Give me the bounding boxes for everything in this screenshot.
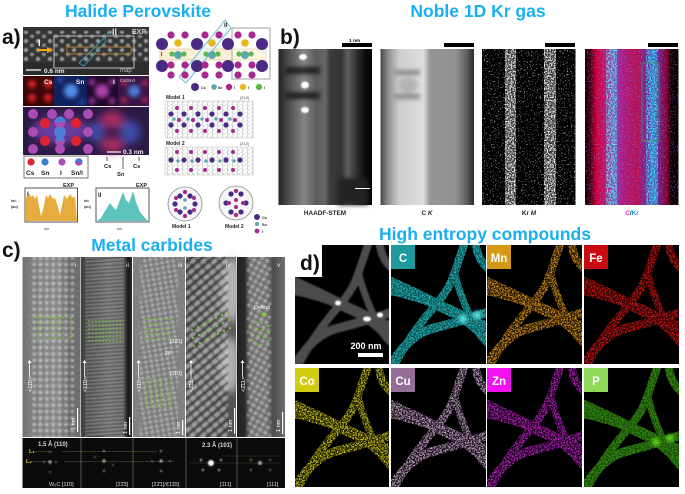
line profile I bbox=[11, 183, 78, 231]
HRTEM image v: v bbox=[277, 262, 281, 269]
line profile I: Int. bbox=[11, 199, 17, 203]
image captions: HAADF-STEM bbox=[304, 210, 346, 217]
HRTEM image i: <11̄0> bbox=[28, 377, 34, 392]
HRTEM image ii bbox=[81, 257, 132, 437]
model 1 cross-section bbox=[168, 187, 202, 230]
HAADF-STEM image bbox=[278, 49, 372, 205]
crystal structure bbox=[156, 20, 270, 83]
HRTEM image v: 1 nm bbox=[276, 419, 282, 432]
column labels with arrows: Sn bbox=[117, 172, 125, 178]
column labels with arrows bbox=[104, 157, 140, 178]
HRTEM image iii: [110] bbox=[170, 371, 182, 377]
HRTEM image v: <2̄11> bbox=[241, 377, 247, 392]
map: C bbox=[387, 241, 491, 367]
crystal legend: Cs bbox=[201, 86, 206, 90]
crystal legend: Sn bbox=[218, 86, 223, 90]
map: P bbox=[580, 364, 684, 490]
label d) on white tab bbox=[295, 245, 322, 277]
column labels with arrows: Cs bbox=[104, 164, 111, 170]
model 2 nanotube bbox=[165, 141, 253, 175]
HAADF fibers image: 200 nm bbox=[350, 341, 382, 351]
panel c: metal carbides bbox=[2, 239, 285, 488]
FFT strip: [111] bbox=[267, 482, 279, 488]
column labels with arrows: Cs bbox=[133, 164, 140, 170]
legend: elements: I bbox=[60, 170, 62, 177]
model 2 nanotube: Model 2 bbox=[166, 141, 185, 147]
FFT strip: [22̄1]//[11̄0] bbox=[152, 482, 180, 488]
crystal structure: I bbox=[161, 52, 163, 58]
label a): a) bbox=[2, 26, 21, 49]
line profile II: II bbox=[98, 193, 102, 199]
map: Mn: Mn bbox=[491, 253, 507, 265]
model 1 nanotube bbox=[165, 95, 253, 138]
panel a: halide perovskite bbox=[2, 20, 270, 234]
map: P: P bbox=[592, 376, 600, 388]
model 2 nanotube: (21,0) bbox=[240, 142, 249, 146]
elemental maps: Cs Sn I Cs/Sn/I: I bbox=[113, 79, 115, 86]
map: Zn bbox=[483, 364, 587, 490]
HRTEM image iii bbox=[133, 257, 185, 437]
map: Co bbox=[291, 365, 394, 489]
cross-section legend: Cs bbox=[262, 216, 267, 220]
HRTEM image iii: iii bbox=[178, 262, 182, 269]
crystal legend: I bbox=[264, 86, 265, 90]
line profile II: (au) bbox=[84, 205, 92, 209]
elemental maps: Cs Sn I Cs/Sn/I: Cs bbox=[44, 79, 53, 86]
label d) on white tab: d) bbox=[300, 252, 320, 275]
map: C: C bbox=[399, 253, 407, 265]
HRTEM image iii: [221] bbox=[170, 339, 183, 345]
line profile I: (au) bbox=[11, 205, 19, 209]
HRTEM image iv: <2̄11> bbox=[189, 377, 195, 392]
HAADF fibers image bbox=[291, 241, 395, 367]
cross-section legend: Sn bbox=[262, 223, 268, 227]
HRTEM image iv: iv bbox=[226, 262, 231, 269]
FFT strip: L₁ bbox=[29, 449, 35, 455]
FFT strip: [111] bbox=[220, 482, 232, 488]
FFT strip: W₂C [11̄0] bbox=[49, 482, 74, 488]
cross-section legend bbox=[254, 214, 268, 234]
model 1 cross-section: Model 1 bbox=[172, 224, 191, 230]
FFT strip: 1.5 Å (110) bbox=[38, 441, 68, 448]
HRTEM image iii: 25° bbox=[165, 351, 173, 357]
scale bars bbox=[342, 38, 678, 47]
atomic overlay map bbox=[23, 107, 149, 156]
FFT strip: L₂ bbox=[26, 459, 32, 465]
line profile I: nm bbox=[44, 227, 49, 231]
HRTEM image iii: <11̄0> bbox=[137, 377, 143, 392]
HRTEM image ii: ii bbox=[126, 262, 129, 269]
legend: elements: Cs bbox=[26, 170, 35, 177]
map: Zn: Zn bbox=[492, 376, 506, 388]
C/Kr overlay map bbox=[585, 49, 678, 205]
HRTEM image i: 1 nm bbox=[71, 417, 77, 430]
HRTEM image ii: 1 nm bbox=[123, 421, 129, 434]
model 1 nanotube: (21,0) bbox=[240, 96, 249, 100]
legend: elements bbox=[24, 156, 88, 178]
HRTEM image v: Defect bbox=[254, 305, 270, 311]
HRTEM image iv bbox=[186, 257, 242, 437]
map: Fe bbox=[580, 241, 684, 367]
FFT strip: 2.3 Å (101̄) bbox=[202, 442, 232, 449]
model 2 cross-section bbox=[219, 186, 253, 230]
label b): b) bbox=[280, 26, 300, 49]
STEM image with lattice: I bbox=[38, 38, 41, 48]
crystal structure: II bbox=[224, 23, 228, 29]
panel d: high entropy compounds bbox=[291, 241, 684, 490]
FFT strip bbox=[22, 438, 285, 488]
HRTEM image iii: 1 nm bbox=[176, 421, 182, 434]
image captions: Kr M bbox=[522, 210, 537, 217]
HRTEM image i bbox=[22, 257, 80, 437]
HRTEM image v bbox=[237, 257, 285, 437]
label c): c) bbox=[2, 239, 21, 262]
scale bars: 1 nm bbox=[349, 38, 360, 44]
line profile II: nm bbox=[117, 227, 122, 231]
HRTEM image ii: <11̄0> bbox=[83, 377, 89, 392]
HRTEM image iv: 1 nm bbox=[228, 419, 234, 432]
image captions bbox=[304, 210, 639, 217]
legend: elements: Sn/I bbox=[71, 170, 83, 177]
STEM image with lattice: EXP bbox=[132, 29, 146, 36]
image captions: C/Kr bbox=[625, 210, 639, 217]
map: Cu bbox=[387, 364, 491, 490]
STEM image with lattice: II bbox=[112, 27, 117, 37]
line profile II: Int. bbox=[84, 199, 90, 203]
title: High entropy compounds: High entropy compounds bbox=[379, 224, 591, 244]
elemental maps: Cs Sn I Cs/Sn/I: Cs/Sn/I bbox=[120, 78, 135, 83]
crystal legend: I bbox=[248, 86, 249, 90]
legend: elements: Sn bbox=[41, 170, 49, 177]
title: Metal carbides: Metal carbides bbox=[91, 235, 213, 255]
line profile I: I bbox=[27, 192, 29, 198]
STEM image with lattice: 0.6 nm bbox=[44, 68, 65, 75]
C K map bbox=[380, 49, 474, 205]
Kr M map bbox=[482, 49, 576, 205]
panel b: noble Kr gas bbox=[278, 26, 678, 217]
STEM image with lattice bbox=[23, 27, 149, 75]
map: Mn bbox=[483, 241, 587, 367]
elemental maps: Cs Sn I Cs/Sn/I: Sn bbox=[76, 79, 84, 86]
model 1 nanotube: Model 1 bbox=[166, 95, 185, 101]
map: Fe: Fe bbox=[589, 253, 603, 265]
cross-section legend: I bbox=[262, 230, 263, 234]
elemental maps: Cs Sn I Cs/Sn/I bbox=[23, 76, 149, 106]
line profile I: EXP bbox=[63, 183, 74, 189]
line profile II bbox=[84, 183, 149, 231]
FFT strip: [22̄3] bbox=[116, 482, 129, 488]
model 2 cross-section: Model 2 bbox=[225, 224, 244, 230]
map: Co: Co bbox=[299, 376, 315, 388]
atomic overlay map: 0.3 nm bbox=[123, 149, 144, 156]
crystal legend bbox=[191, 83, 265, 91]
image captions: C K bbox=[421, 210, 433, 217]
title: Halide Perovskite: Halide Perovskite bbox=[65, 1, 211, 21]
STEM image with lattice: map bbox=[120, 68, 132, 74]
line profile II: EXP bbox=[136, 183, 147, 189]
map: Cu: Cu bbox=[395, 376, 411, 388]
HRTEM image i: i bbox=[75, 262, 76, 269]
crystal legend: I bbox=[234, 86, 235, 90]
title: Noble 1D Kr gas: Noble 1D Kr gas bbox=[410, 1, 546, 21]
